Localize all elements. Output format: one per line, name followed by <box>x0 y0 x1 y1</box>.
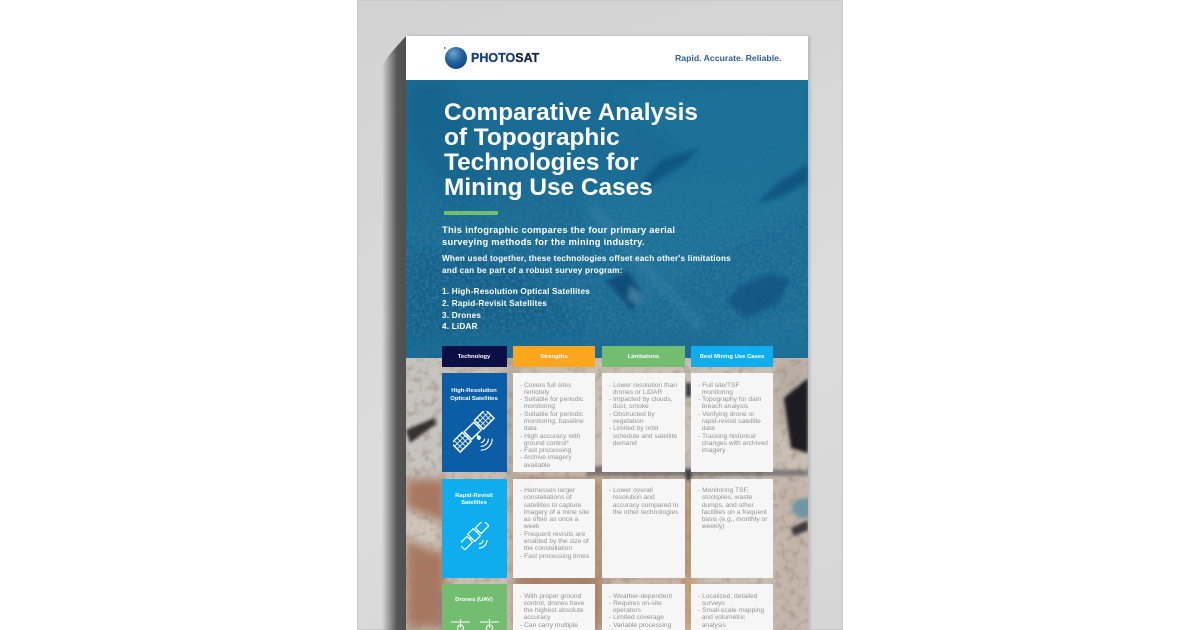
title: Mining Use Cases <box>444 174 653 201</box>
row 1 strengths <box>513 373 595 472</box>
row 1 technology: High-Resolution Optical Satellites: High-Resolution <box>451 388 497 394</box>
row 3 strengths: the highest absolute <box>524 607 584 614</box>
row 2 technology: Rapid-Revisit Satellites: Satellites <box>461 500 487 506</box>
row 2 strengths: imagery of a mine site <box>524 509 589 516</box>
row 1 best use cases: monitoring <box>702 389 733 396</box>
row 1 best use cases: - Tracking historical <box>698 433 756 440</box>
row 1 strengths: - Fast processing <box>520 447 571 454</box>
row 1 technology: High-Resolution Optical Satellites: Optical Satellites <box>450 396 498 402</box>
row 2 strengths: - Harnesses larger <box>520 487 575 494</box>
numbered list of technologies <box>442 287 590 331</box>
supporting text: and can be part of a robust survey program: <box>442 266 623 275</box>
title: Technologies for <box>444 149 639 176</box>
row 1 best use cases: - Full site/TSF <box>698 382 740 388</box>
icon: drones <box>451 619 499 630</box>
intro text <box>442 225 675 247</box>
row 1 strengths: ground control* <box>524 440 569 447</box>
row 2 limitations: resolution and <box>613 494 655 501</box>
row 1 strengths: - Suitable for periodic <box>520 396 583 403</box>
row 1 strengths: remotely <box>524 389 549 396</box>
row 1 limitations: dust, smoke <box>613 403 649 410</box>
row 1 strengths: - Covers full sites <box>520 382 571 388</box>
supporting text <box>442 254 731 275</box>
row 1 strengths: - Archive imagery <box>520 454 572 461</box>
row 1 strengths: available <box>524 462 550 469</box>
numbered list of technologies: 4. LiDAR <box>442 322 478 331</box>
backdrop panel <box>357 0 843 630</box>
row 1 best use cases <box>691 373 773 472</box>
numbered list of technologies: 2. Rapid-Revisit Satellites <box>442 299 547 308</box>
row 1 strengths: - Suitable for periodic <box>520 411 583 418</box>
row 1 strengths: monitoring <box>524 403 555 410</box>
row 1 limitations: demand <box>613 440 637 447</box>
row 3 limitations: operators <box>613 607 641 614</box>
row 1 best use cases: - Verifying drone or <box>698 411 755 418</box>
header: Limitations: Limitations <box>628 354 659 360</box>
row 2 strengths: - Frequent revisits are <box>520 531 585 538</box>
row 3 best use cases: - Localized, detailed <box>698 592 757 600</box>
row 3 best use cases: - Small-scale mapping <box>698 607 764 614</box>
row 2 technology: Rapid-Revisit Satellites <box>442 478 506 578</box>
row 2 strengths: as often as once a <box>524 516 578 523</box>
header: Best Mining Use Cases: Best Mining Use Cases <box>700 354 764 360</box>
row 1 technology: High-Resolution Optical Satellites <box>442 373 506 472</box>
intro text: This infographic compares the four primary aerial <box>442 225 675 235</box>
row 3 limitations: - Weather-dependent <box>609 592 672 600</box>
document page <box>406 36 808 630</box>
row 2 best use cases <box>691 478 773 578</box>
row 1 limitations <box>602 373 685 472</box>
title: Comparative Analysis <box>444 99 698 126</box>
row 2 limitations: accuracy compared to <box>613 502 679 509</box>
numbered list of technologies: 3. Drones <box>442 311 481 320</box>
row 3 best use cases: surveys <box>702 600 725 607</box>
header: Technology: Technology <box>458 354 490 360</box>
header: Technology <box>442 346 506 367</box>
supporting text: When used together, these technologies offset each other's limitations <box>442 254 731 263</box>
row 3 best use cases: and volumetric <box>702 614 745 621</box>
row 1 limitations: - Obstructed by <box>609 411 655 418</box>
hero background image <box>406 80 808 358</box>
row 2 strengths: satellites to capture <box>524 502 581 509</box>
title <box>444 99 698 201</box>
row 2 best use cases: basis (e.g., monthly or <box>702 516 768 523</box>
row 1 best use cases: breach analysis <box>702 403 748 410</box>
row 3 limitations: - Variable processing <box>609 622 671 629</box>
row 1 best use cases: changes with archived <box>702 440 768 447</box>
accent bar <box>444 211 498 215</box>
row 3 strengths: - Can carry multiple <box>520 622 578 629</box>
row 1 best use cases: - Topography for dam <box>698 396 761 403</box>
row 1 best use cases: imagery <box>702 447 726 454</box>
header: Best Mining Use Cases <box>691 346 773 367</box>
row 2 limitations: the other technologies <box>613 509 679 516</box>
header: Limitations <box>602 346 685 367</box>
row 2 strengths <box>513 478 595 578</box>
row 1 strengths: - High accuracy with <box>520 433 580 440</box>
row 3 strengths <box>513 584 595 630</box>
row 3 limitations <box>602 584 685 630</box>
row 1 limitations: vegetation <box>613 418 644 425</box>
row 2 limitations: - Lower overall <box>609 487 653 494</box>
icon: satellite <box>453 411 495 454</box>
row 3 best use cases: analysis <box>702 622 726 629</box>
row 3 limitations: - Limited coverage <box>609 614 664 621</box>
row 2 strengths: week <box>524 523 539 530</box>
row 1 limitations: drones or LiDAR <box>613 389 662 396</box>
row 1 best use cases: rapid-revisit satellite <box>702 418 761 425</box>
lower terrain background image <box>406 358 808 630</box>
document shadow <box>382 36 406 630</box>
icon: globe <box>444 47 467 69</box>
icon: small satellite <box>461 522 489 550</box>
row 2 best use cases: weekly) <box>702 523 724 530</box>
row 2 technology: Rapid-Revisit Satellites: Rapid-Revisit <box>455 492 493 498</box>
logo: Photosat <box>444 47 540 69</box>
row 1 limitations: schedule and satellite <box>613 433 677 440</box>
row 3 strengths: - With proper ground <box>520 592 581 600</box>
row 2 best use cases: dumps, and other <box>702 502 754 509</box>
row 2 strengths: the constellation <box>524 545 572 552</box>
row 2 limitations <box>602 478 685 578</box>
row 3 best use cases <box>691 584 773 630</box>
row 2 strengths: constellations of <box>524 494 572 501</box>
row 2 strengths: enabled by the size of <box>524 538 589 545</box>
row 3 strengths: accuracy <box>524 614 550 621</box>
row 3 technology: Drones (UAV): Drones (UAV) <box>455 596 493 602</box>
title: of Topographic <box>444 124 620 151</box>
row 2 best use cases: facilities on a frequent <box>702 509 767 516</box>
row 1 limitations: - Limited by orbit <box>609 425 658 432</box>
row 1 limitations: - Impacted by clouds, <box>609 396 673 403</box>
logo wordmark: PHOTOSAT <box>471 50 539 64</box>
row 2 strengths: - Fast processing times <box>520 553 589 560</box>
row 3 limitations: - Requires on-site <box>609 600 662 607</box>
row 3 strengths: control, drones have <box>524 600 584 607</box>
row 1 limitations: - Lower resolution than <box>609 382 677 388</box>
row 2 best use cases: - Monitoring TSF, <box>698 487 749 494</box>
intro text: surveying methods for the mining industry. <box>442 237 645 247</box>
header: Strengths <box>513 346 595 367</box>
row 1 strengths: monitoring; baseline <box>524 418 584 425</box>
row 1 strengths: data <box>524 425 537 432</box>
row 1 best use cases: data <box>702 425 715 432</box>
header: Strengths: Strengths <box>540 354 568 360</box>
row 2 best use cases: stockpiles, waste <box>702 494 752 501</box>
numbered list of technologies: 1. High-Resolution Optical Satellites <box>442 287 590 296</box>
row 3 technology: Drones (UAV) <box>442 584 506 630</box>
tagline: Rapid. Accurate. Reliable. <box>675 53 781 63</box>
